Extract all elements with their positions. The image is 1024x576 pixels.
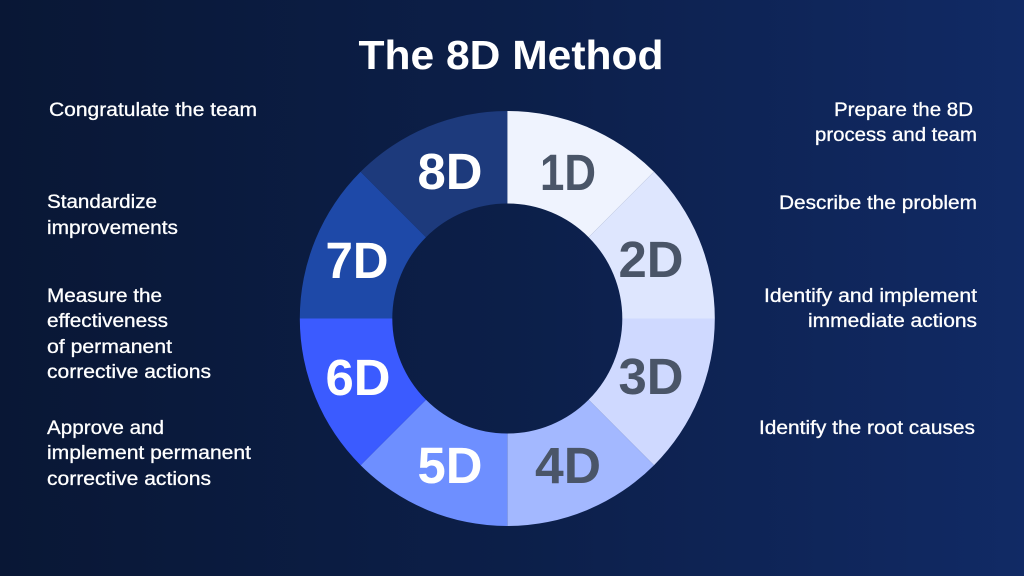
segment 2D (589, 172, 715, 318)
segment 1D (507, 111, 654, 237)
label: 3D Identify and implement immediate actions (764, 286, 978, 332)
donut chart (300, 111, 715, 526)
label: 5D Approve and implement permanent corrective actions: Approve and (47, 418, 164, 439)
label: 8D Congratulate the team: Congratulate the team (49, 100, 257, 121)
segment 8D (361, 111, 507, 237)
label: 1D Prepare the 8D process and team: Prepare the 8D (834, 100, 973, 121)
label: 7D Standardize improvements: improvements (47, 218, 178, 239)
label: 4D Identify the root causes: Identify the root causes (759, 418, 975, 439)
segment 3D (589, 318, 715, 465)
label: 6D Measure the effectiveness of permanent corrective actions: corrective actions (47, 362, 211, 383)
label: 6D Measure the effectiveness of permanent corrective actions: Measure the (47, 286, 162, 307)
label: 6D Measure the effectiveness of permanent corrective actions: of permanent (47, 337, 173, 358)
segment 5D: 5D (418, 437, 482, 494)
segment 7D (300, 172, 426, 318)
label: 5D Approve and implement permanent corrective actions (47, 418, 252, 490)
segment 6D: 6D (326, 349, 390, 406)
segment 4D (507, 400, 654, 526)
segment 5D (361, 400, 507, 526)
label: 3D Identify and implement immediate actions: Identify and implement (764, 286, 978, 307)
label: 6D Measure the effectiveness of permanent corrective actions (47, 286, 211, 383)
segment 4D: 4D (535, 437, 601, 494)
label: 3D Identify and implement immediate actions: immediate actions (808, 311, 977, 332)
segment 2D: 2D (618, 231, 684, 288)
label: 7D Standardize improvements (47, 192, 178, 239)
segment 1D: 1D (540, 144, 596, 201)
label: 2D Describe the problem: Describe the problem (779, 193, 977, 214)
label: 7D Standardize improvements: Standardize (47, 192, 157, 213)
segment 6D (300, 318, 426, 465)
segment 3D: 3D (618, 348, 684, 405)
label: 5D Approve and implement permanent corrective actions: corrective actions (47, 469, 211, 490)
label: 5D Approve and implement permanent corrective actions: implement permanent (47, 443, 252, 464)
segment 7D: 7D (326, 232, 388, 289)
title: The 8D Method (358, 32, 664, 78)
label: 6D Measure the effectiveness of permanent corrective actions: effectiveness (47, 311, 168, 332)
label: 1D Prepare the 8D process and team (815, 100, 977, 146)
label: 1D Prepare the 8D process and team: process and team (815, 125, 977, 146)
segment 8D: 8D (418, 143, 482, 200)
